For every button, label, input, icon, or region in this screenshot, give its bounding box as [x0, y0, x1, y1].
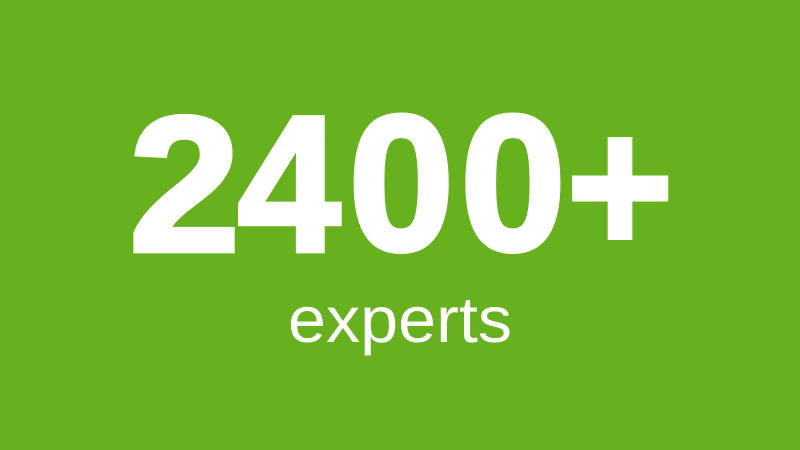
- headline number: [129, 75, 673, 294]
- headline number: +: [567, 78, 673, 294]
- headline number: 2: [129, 76, 240, 292]
- headline number: 0: [348, 75, 454, 291]
- headline number: 0: [460, 75, 566, 291]
- headline number: 4: [238, 76, 340, 293]
- caption: experts: [288, 283, 512, 356]
